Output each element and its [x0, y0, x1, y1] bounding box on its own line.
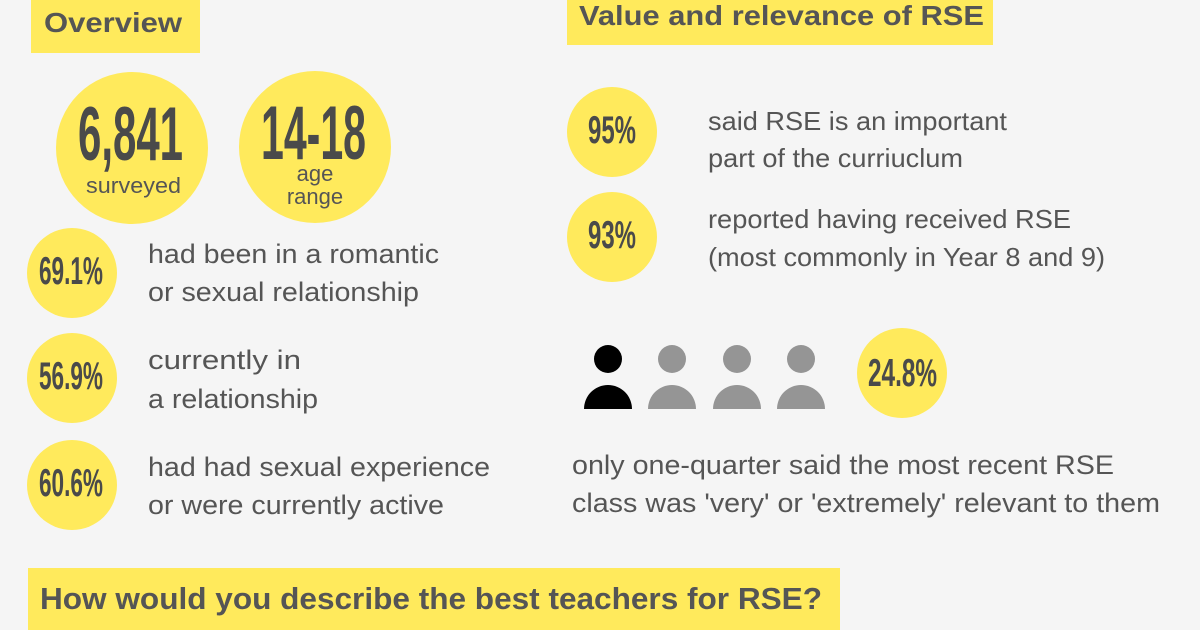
stat: 69.1%: 69.1%	[39, 250, 103, 293]
stat: 56.9%	[27, 333, 318, 423]
stat: 69.1%: had been in a romantic	[148, 239, 439, 269]
stat: 95%: part of the curriuclum	[708, 143, 963, 173]
stat: 60.6%: 60.6%	[39, 462, 103, 505]
stat: 24.8%	[857, 328, 947, 418]
stat: 60.6%: had had sexual experience	[148, 452, 490, 482]
stat: 56.9%: currently in	[148, 345, 301, 375]
text: relevance caption: class was 'very' or 'extremely' relevant to them	[572, 488, 1160, 518]
heading: best teachers question	[28, 568, 840, 630]
stat circle: 6,841 surveyed: 6,841	[78, 92, 183, 177]
stat circle: 14-18 age range: range	[287, 184, 343, 209]
stat: 93%	[567, 192, 1105, 282]
stat: 60.6%	[27, 440, 490, 530]
stat: 95%: said RSE is an important	[708, 106, 1008, 136]
heading: best teachers question: How would you describe the best teachers for RSE?	[40, 581, 822, 616]
heading: Overview	[31, 0, 200, 53]
stat: 95%	[567, 87, 1008, 177]
heading: Value and relevance of RSE: Value and relevance of RSE	[579, 0, 984, 31]
text: relevance caption: only one-quarter said the most recent RSE	[572, 450, 1114, 480]
stat: 56.9%: 56.9%	[39, 355, 103, 398]
stat: 69.1%: or sexual relationship	[148, 277, 419, 307]
heading: Value and relevance of RSE	[567, 0, 993, 45]
heading: Overview: Overview	[44, 7, 182, 38]
stat: 60.6%: or were currently active	[148, 490, 444, 520]
stat: 93%: (most commonly in Year 8 and 9)	[708, 242, 1105, 272]
stat: 95%: 95%	[588, 109, 636, 152]
stat circle: 6,841 surveyed	[56, 72, 208, 224]
stat: 56.9%: a relationship	[148, 384, 318, 414]
stat circle: 6,841 surveyed: surveyed	[86, 173, 181, 198]
text: relevance caption	[572, 450, 1160, 518]
stat circle: 14-18 age range: age	[297, 161, 333, 186]
stat: 93%: 93%	[588, 214, 636, 257]
stat: 69.1%	[27, 228, 439, 318]
stat: 93%: reported having received RSE	[708, 204, 1071, 234]
stat: 24.8%: 24.8%	[868, 352, 937, 395]
stat circle: 14-18 age range	[239, 71, 391, 223]
stat circle: 14-18 age range: 14-18	[261, 91, 366, 176]
icon: people (1 of 4 highlighted)	[584, 345, 825, 409]
